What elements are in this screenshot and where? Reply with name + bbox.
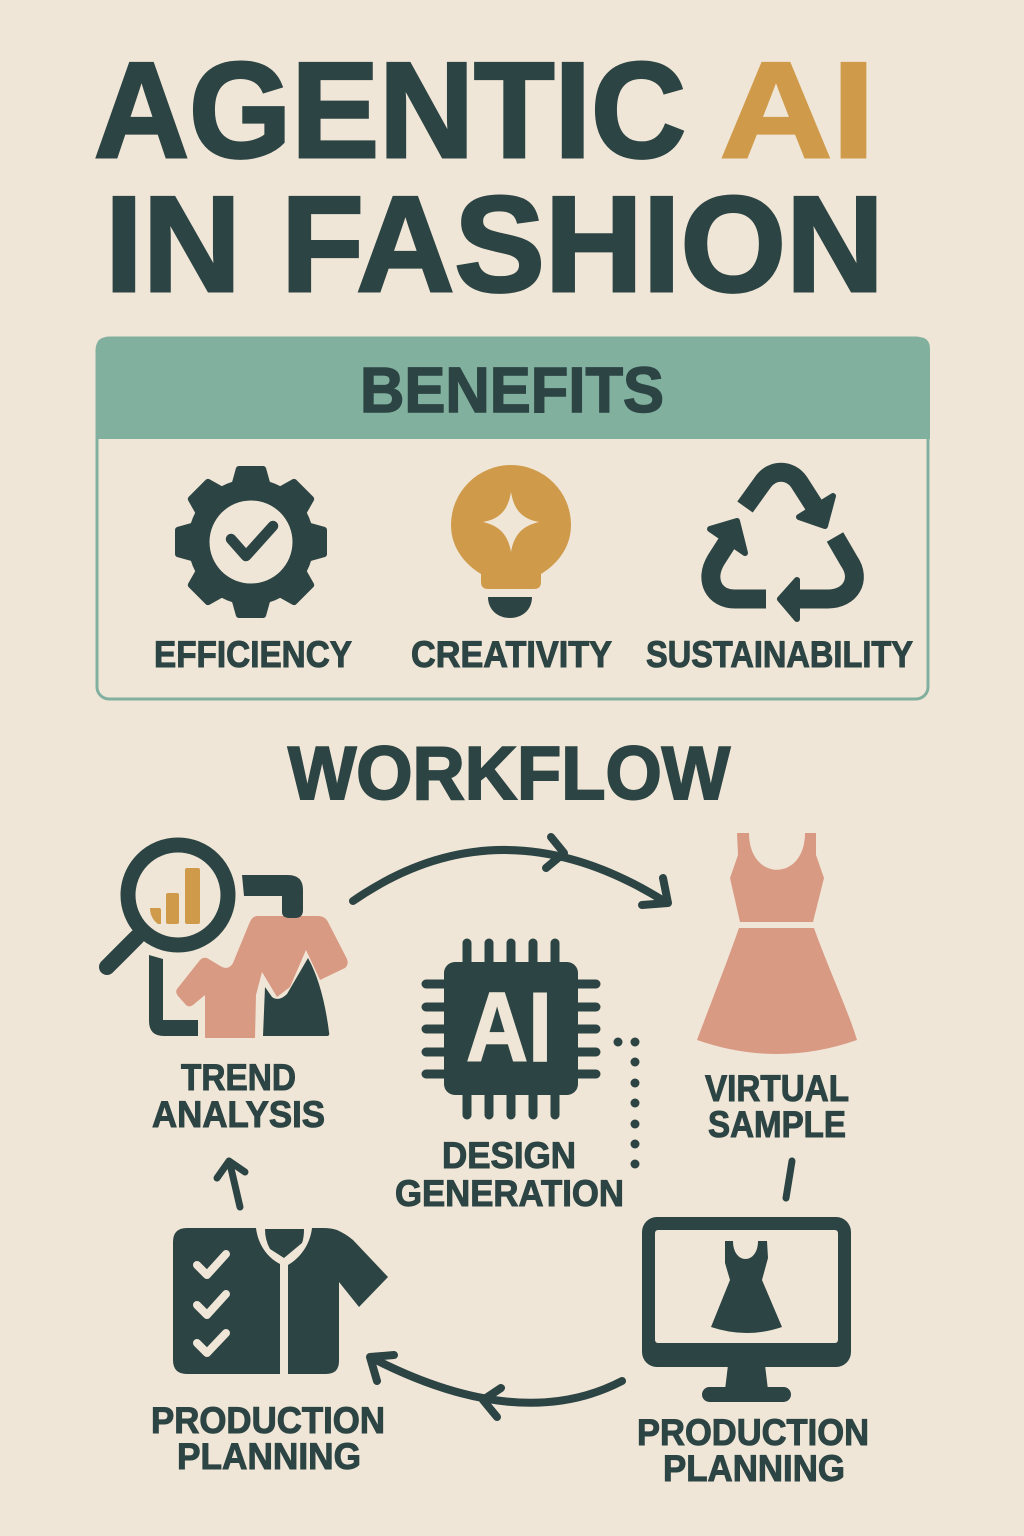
icon: recycle arrows <box>710 472 854 619</box>
icon: dress <box>697 833 857 1054</box>
title: AI <box>720 34 875 186</box>
icon: AI chip: AI <box>466 972 552 1082</box>
icon: light bulb with spark <box>451 465 571 618</box>
label: production planning (right) <box>637 1412 869 1489</box>
benefits header band <box>96 337 930 439</box>
heading: workflow: WORKFLOW <box>288 731 730 815</box>
pink garment <box>176 916 348 1038</box>
label: trend analysis: ANALYSIS <box>152 1094 325 1135</box>
title <box>94 34 884 320</box>
gold bars <box>150 868 200 924</box>
title: IN <box>105 168 241 320</box>
dark garment <box>263 958 329 1036</box>
magnifier <box>107 845 228 967</box>
label: trend analysis: TREND <box>181 1057 296 1098</box>
connector: virtual sample to monitor <box>786 1161 792 1198</box>
title: AGENTIC <box>94 34 686 186</box>
title: FASHION <box>281 168 884 320</box>
label: production planning (left) <box>151 1400 385 1477</box>
label: production planning (left): PRODUCTION <box>151 1400 385 1441</box>
label: virtual sample: SAMPLE <box>708 1104 846 1145</box>
label: trend analysis <box>152 1057 325 1135</box>
icon: monitor with dress <box>642 1217 851 1402</box>
panel: benefits <box>96 337 930 699</box>
label: production planning (left): PLANNING <box>177 1436 361 1477</box>
label: efficiency: EFFICIENCY <box>154 634 352 675</box>
label: virtual sample: VIRTUAL <box>705 1068 849 1109</box>
dotted connector <box>614 1038 640 1168</box>
icon: AI chip <box>426 943 596 1115</box>
icon: trend analysis <box>107 845 348 1038</box>
label: design generation: GENERATION <box>395 1173 624 1214</box>
label: design generation <box>395 1135 624 1214</box>
label: production planning (right): PLANNING <box>663 1448 845 1489</box>
label: creativity: CREATIVITY <box>411 634 612 675</box>
label: virtual sample <box>705 1068 849 1145</box>
arrow: monitor to shirt <box>370 1355 622 1417</box>
arrow: shirt to trend analysis <box>217 1161 245 1207</box>
label: sustainability: SUSTAINABILITY <box>646 634 913 675</box>
icon: shirt with checklist <box>173 1228 388 1374</box>
brackets <box>149 875 303 1036</box>
arrow: trend to virtual sample <box>353 837 668 905</box>
label: production planning (right): PRODUCTION <box>637 1412 869 1453</box>
label: design generation: DESIGN <box>442 1135 576 1176</box>
benefits heading: BENEFITS <box>360 354 664 426</box>
icon: gear with check <box>175 466 327 618</box>
